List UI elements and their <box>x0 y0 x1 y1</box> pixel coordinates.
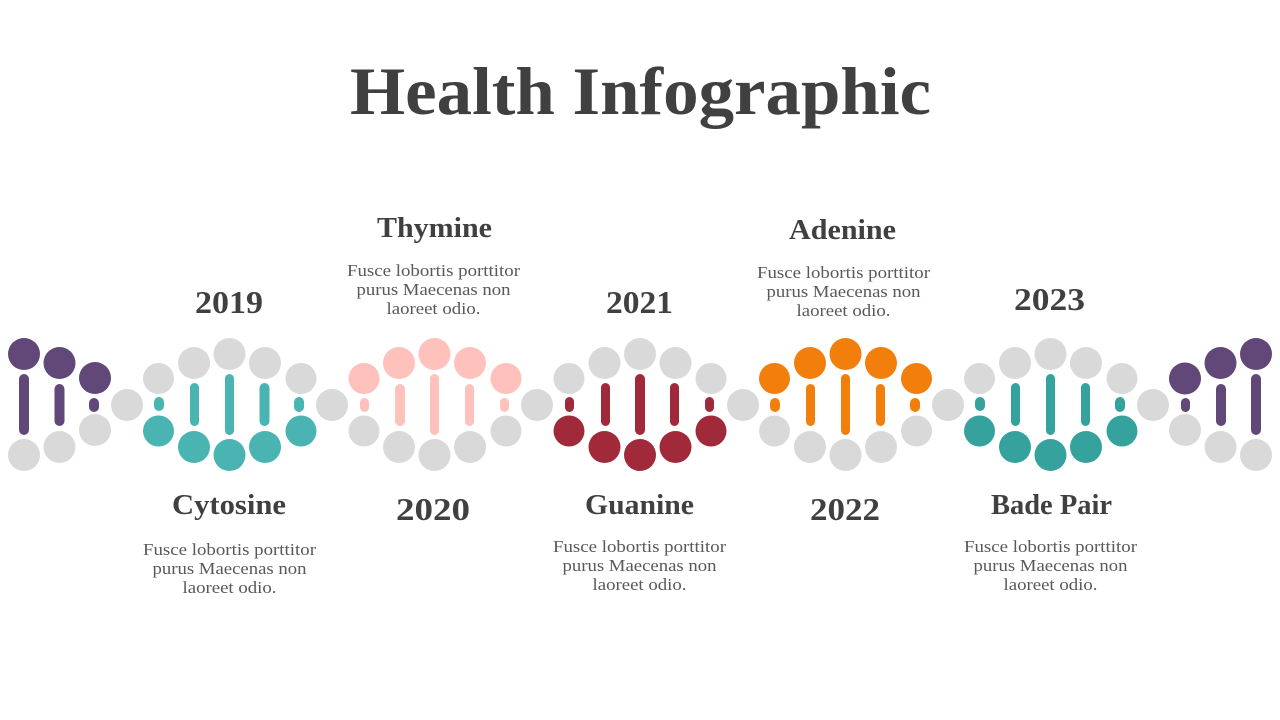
year: 2019: 2019 <box>195 284 263 320</box>
text block: Guanine: Guanine <box>585 490 694 521</box>
text block: Bade Pair: laoreet odio. <box>1004 575 1098 594</box>
DNA segment: 2021 red <box>554 338 726 471</box>
text block: Cytosine: laoreet odio. <box>182 578 276 597</box>
text block: Thymine: Thymine <box>377 213 492 244</box>
text block: Cytosine <box>143 490 317 597</box>
year: 2022: 2022 <box>810 491 880 527</box>
text block: Adenine <box>757 215 931 320</box>
title: Health Infographic <box>350 53 931 129</box>
text block: Cytosine: Fusce lobortis porttitor <box>143 540 317 559</box>
text block: Bade Pair <box>964 490 1138 594</box>
year: 2021: 2021 <box>606 284 673 320</box>
text block: Adenine: Adenine <box>789 215 896 246</box>
DNA segment: 2023 dark teal <box>964 338 1138 471</box>
DNA segment: 2019 teal <box>143 338 316 471</box>
text block: Thymine: purus Maecenas non <box>356 280 510 299</box>
text block: Thymine: laoreet odio. <box>386 299 480 318</box>
text block: Cytosine: Cytosine <box>172 490 286 521</box>
year: 2023: 2023 <box>1014 281 1085 317</box>
DNA segment: 2022 orange <box>759 338 932 471</box>
DNA connector nodes <box>111 389 1169 421</box>
text block: Thymine <box>347 213 521 318</box>
text block: Guanine <box>553 490 727 594</box>
text block: Bade Pair: Fusce lobortis porttitor <box>964 537 1138 556</box>
text block: Adenine: laoreet odio. <box>796 301 890 320</box>
text block: Bade Pair: Bade Pair <box>991 490 1112 521</box>
text block: Cytosine: purus Maecenas non <box>152 559 306 578</box>
text block: Bade Pair: purus Maecenas non <box>974 556 1128 575</box>
text block: Guanine: purus Maecenas non <box>562 556 716 575</box>
text block: Thymine: Fusce lobortis porttitor <box>347 261 521 280</box>
text block: Adenine: Fusce lobortis porttitor <box>757 263 931 282</box>
text block: Adenine: purus Maecenas non <box>766 282 920 301</box>
year: 2020: 2020 <box>396 491 470 527</box>
DNA strand: left purple end <box>8 338 111 471</box>
text block: Guanine: laoreet odio. <box>592 575 686 594</box>
text block: Guanine: Fusce lobortis porttitor <box>553 537 727 556</box>
DNA strand: right purple end <box>1169 338 1272 471</box>
DNA segment: 2020 pink <box>348 338 522 471</box>
